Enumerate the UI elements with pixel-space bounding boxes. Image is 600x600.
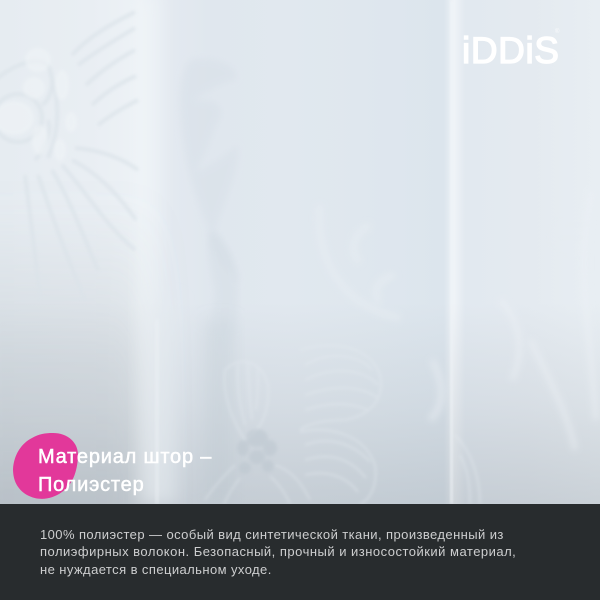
large flower pattern, left bbox=[0, 12, 138, 300]
heading: Материал штор – bbox=[38, 446, 212, 468]
description text: 100% полиэстер — особый вид синтетической ткани, произведенный из bbox=[40, 526, 504, 542]
description text bbox=[40, 526, 516, 576]
logo: IDDIS: iDDiS bbox=[462, 30, 560, 71]
swirl flower, centre right bbox=[319, 205, 442, 420]
soft vertical fold highlights bbox=[138, 0, 235, 504]
shell flower petals, lower centre bbox=[224, 215, 590, 504]
flower rays, lower bbox=[205, 465, 310, 504]
description text: полиэфирных волокон. Безопасный, прочный и износостойкий материал, bbox=[40, 544, 516, 559]
dark description panel bbox=[0, 504, 600, 600]
heading bbox=[38, 446, 212, 496]
leaf shapes, centre top bbox=[180, 59, 240, 285]
pink blob behind heading bbox=[13, 433, 78, 499]
flower petals, left bbox=[0, 48, 77, 161]
heading: Полиэстер bbox=[38, 474, 144, 496]
leaf shape, centre lower bbox=[208, 230, 238, 352]
right edge pattern bbox=[500, 190, 596, 450]
description text: не нуждается в специальном уходе. bbox=[40, 562, 272, 576]
shading, lower left bbox=[0, 200, 150, 540]
logo: IDDIS: ® bbox=[555, 29, 559, 35]
flower centre, lower bbox=[237, 429, 277, 474]
seam lines bbox=[450, 0, 453, 504]
